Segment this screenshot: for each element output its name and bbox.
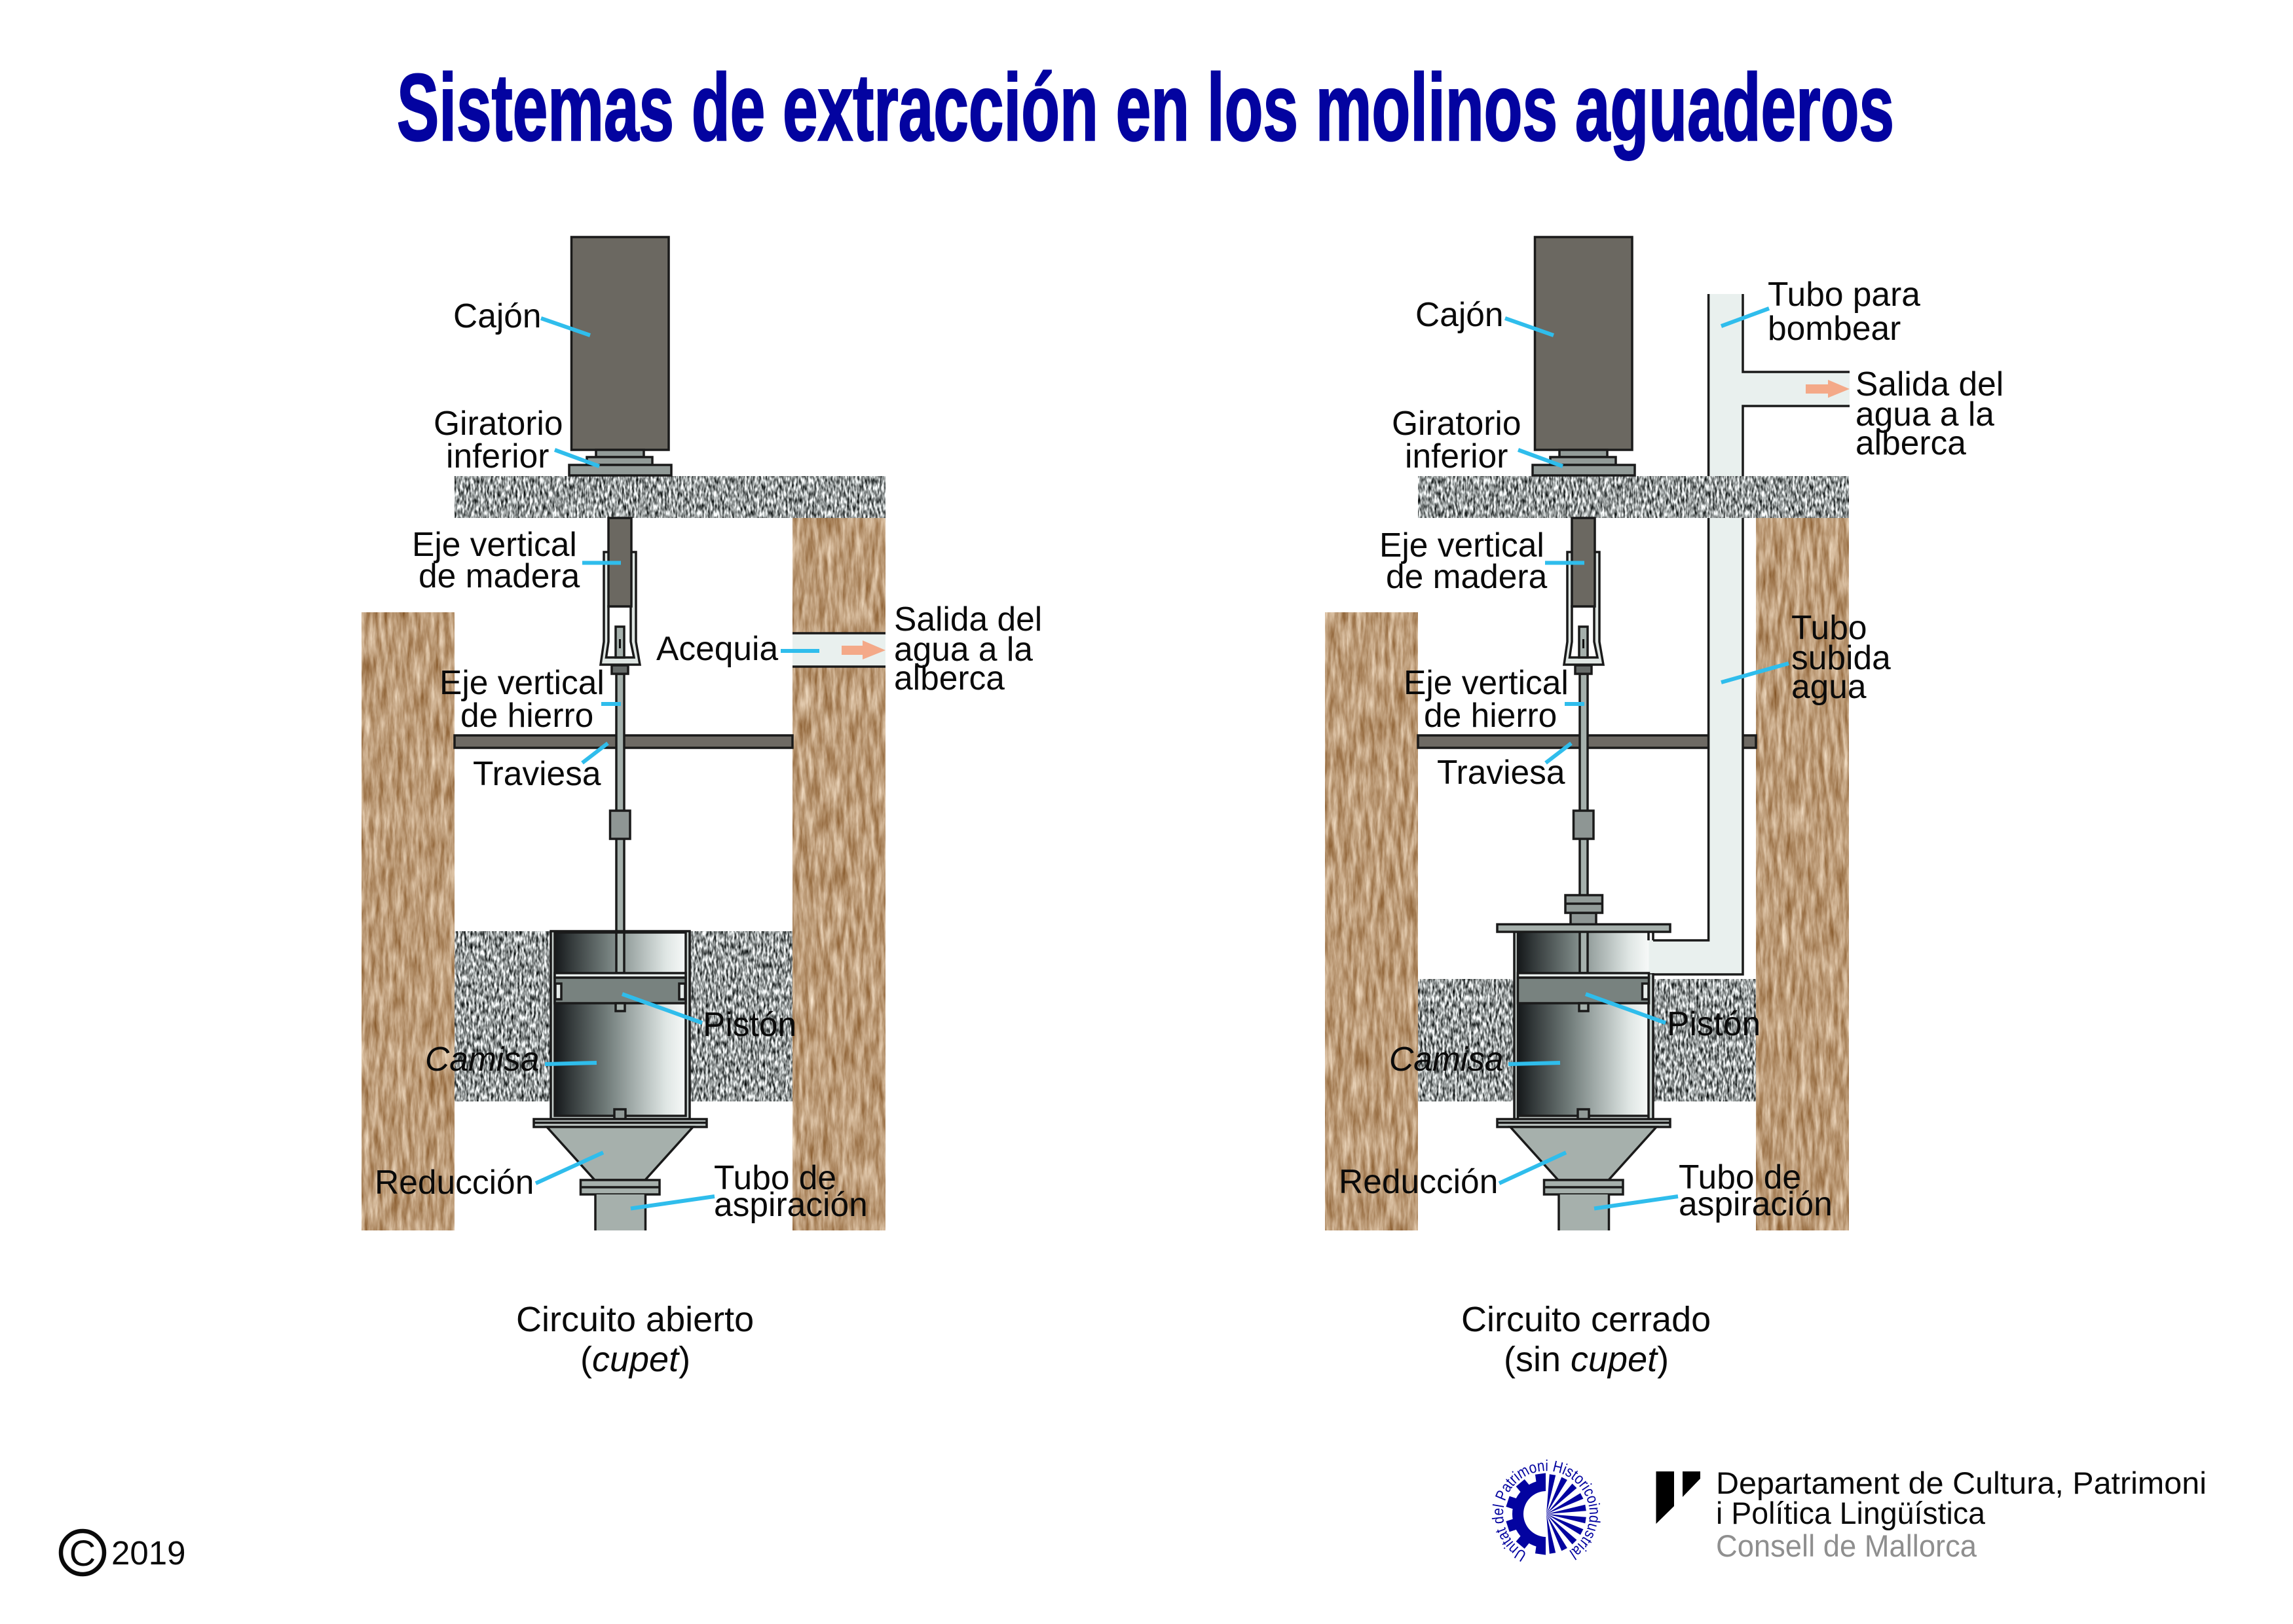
label: Eje vertical de madera <box>412 525 621 595</box>
label: Eje vertical de hierro: de hierro <box>460 696 593 734</box>
label: Giratorio inferior <box>434 404 599 475</box>
icon: copyright symbol: C <box>69 1532 96 1574</box>
label: Tubo de aspiración: Tubo de <box>714 1158 836 1196</box>
labels and leaders <box>375 297 1042 1223</box>
arrow: water outlet <box>1806 380 1850 398</box>
label: Pistón: Pistón <box>1667 1005 1761 1043</box>
right stone wall with channel <box>792 518 886 1230</box>
sleeve joint <box>601 518 640 674</box>
riser pipe with outlet <box>1649 294 1850 974</box>
label: Giratorio inferior: inferior <box>1405 437 1508 475</box>
label: Salida del agua <box>1855 365 2004 462</box>
icon: rays <box>1546 1474 1586 1554</box>
sleeve joint <box>1564 518 1603 674</box>
labels and leaders <box>1339 275 2004 1223</box>
copyright <box>61 1531 185 1574</box>
label: Salida del agua: Salida del <box>894 600 1042 638</box>
panel: circuito abierto <box>362 237 1042 1379</box>
label: Salida del agua: agua a la <box>894 630 1033 668</box>
left stone wall <box>362 612 455 1230</box>
text: Departament de Cultura: Departament de Cultura, Patrimoni <box>1716 1466 2207 1500</box>
suction tube flange <box>580 1180 660 1194</box>
arrow: water outlet <box>842 640 886 659</box>
label: Tubo subida agua: Tubo <box>1791 608 1867 646</box>
lower flange <box>534 1119 707 1127</box>
suction tube <box>595 1194 646 1230</box>
label: Eje vertical de madera: Eje vertical <box>412 525 577 563</box>
cylinder <box>1514 924 1653 1119</box>
label: Reducción: Reducción <box>1339 1162 1498 1200</box>
caption: circuito cerrado <box>1461 1300 1711 1379</box>
wooden box <box>571 237 669 450</box>
cylinder <box>551 931 690 1119</box>
suction tube flange <box>1544 1180 1623 1194</box>
logo ring text: Unitat del Patrimoni Historicoindustrial <box>1492 1459 1601 1562</box>
label: Pistón <box>1586 994 1761 1043</box>
label: Tubo subida agua: subida <box>1791 638 1891 676</box>
iron rod <box>1580 674 1588 896</box>
masonry around cylinder <box>455 931 792 1101</box>
caption: circuito cerrado: (sin cupet) <box>1504 1340 1669 1379</box>
label: Tubo para bombear: Tubo para <box>1768 275 1920 313</box>
label: Salida del agua: agua a la <box>1855 395 1994 433</box>
masonry floor <box>1418 476 1849 518</box>
top flange and gland <box>1497 895 1670 932</box>
label: Reducción <box>1339 1153 1566 1200</box>
caption: circuito abierto: (cupet) <box>580 1340 690 1379</box>
right stone wall <box>1756 518 1849 1230</box>
caption: circuito abierto <box>516 1300 754 1379</box>
acequia channel <box>792 633 886 667</box>
label: Tubo de aspiración: Tubo de <box>1679 1158 1801 1196</box>
lower pivot plates <box>569 450 671 475</box>
icon: copyright symbol <box>61 1531 104 1574</box>
logo: Consell de Mallorca mark <box>1656 1471 1700 1524</box>
reduction cone <box>547 1127 693 1180</box>
label: Tubo de aspiración <box>631 1158 868 1223</box>
icon: half gear <box>1506 1473 1548 1555</box>
label: Salida del agua <box>894 600 1042 697</box>
label: Giratorio inferior: Giratorio <box>1392 404 1521 442</box>
label: Cajón <box>1415 295 1554 335</box>
label: Tubo subida agua: agua <box>1791 667 1867 705</box>
label: Salida del agua: alberca <box>1855 424 1966 462</box>
caption: circuito abierto: Circuito abierto <box>516 1300 754 1339</box>
label: Tubo para bombear: bombear <box>1768 309 1901 347</box>
label: Camisa: Camisa <box>425 1040 540 1078</box>
label: Camisa: Camisa <box>1389 1040 1504 1078</box>
left stone wall <box>1325 612 1418 1230</box>
lower flange <box>1497 1119 1670 1127</box>
text: Departament de Cultura <box>1716 1466 2207 1563</box>
label: Tubo de aspiración <box>1594 1158 1833 1223</box>
text: Departament de Cultura: i Política Lingüística <box>1716 1496 1986 1530</box>
suction tube <box>1559 1194 1609 1230</box>
caption: circuito cerrado: Circuito cerrado <box>1461 1300 1711 1339</box>
label: Eje vertical de hierro: Eje vertical <box>439 663 605 701</box>
label: Traviesa: Traviesa <box>473 754 601 792</box>
label: Eje vertical de hierro: de hierro <box>1424 696 1557 734</box>
iron rod <box>616 674 624 973</box>
label: Tubo de aspiración: aspiración <box>714 1185 868 1223</box>
label: Eje vertical de hierro: Eje vertical <box>1404 663 1569 701</box>
label: Eje vertical de madera: de madera <box>419 557 580 595</box>
label: Giratorio inferior: Giratorio <box>434 404 563 442</box>
label: Tubo de aspiración: aspiración <box>1679 1185 1833 1223</box>
cross beam <box>1418 735 1756 748</box>
wooden box <box>1535 237 1632 450</box>
iron coupling <box>610 811 630 839</box>
label: Eje vertical de hierro <box>439 663 621 734</box>
label: Acequia: Acequia <box>656 629 778 667</box>
label: Traviesa: Traviesa <box>1437 753 1565 791</box>
copyright year: 2019 <box>111 1534 185 1572</box>
panel: circuito cerrado <box>1325 237 2004 1379</box>
masonry floor <box>455 476 886 518</box>
label: Eje vertical de madera: de madera <box>1386 557 1548 595</box>
label: Cajón <box>453 297 590 335</box>
iron coupling <box>1573 811 1594 839</box>
label: Eje vertical de madera <box>1379 526 1584 595</box>
label: Giratorio inferior: inferior <box>446 437 549 475</box>
label: Tubo subida agua <box>1721 608 1891 705</box>
lower pivot plates <box>1533 450 1635 475</box>
label: Salida del agua: Salida del <box>1855 365 2004 403</box>
label: Cajón: Cajón <box>453 297 542 335</box>
label: Eje vertical de hierro <box>1404 663 1584 734</box>
label: Pistón <box>622 994 796 1043</box>
label: Cajón: Cajón <box>1415 295 1504 333</box>
label: Pistón: Pistón <box>703 1005 796 1043</box>
label: Giratorio inferior <box>1392 404 1563 475</box>
label: Reducción <box>375 1153 603 1201</box>
reduction cone <box>1510 1127 1656 1180</box>
cross beam <box>455 735 792 748</box>
text: Departament de Cultura: Consell de Mallorca <box>1716 1528 1977 1563</box>
label: Reducción: Reducción <box>375 1163 534 1201</box>
label: Tubo para bombear <box>1721 275 1920 347</box>
label: Salida del agua: alberca <box>894 659 1005 697</box>
label: Eje vertical de madera: Eje vertical <box>1379 526 1544 564</box>
logo: Unitat del Patrimoni Historicoindustrial <box>1492 1459 1601 1562</box>
masonry around cylinder <box>1418 979 1756 1101</box>
